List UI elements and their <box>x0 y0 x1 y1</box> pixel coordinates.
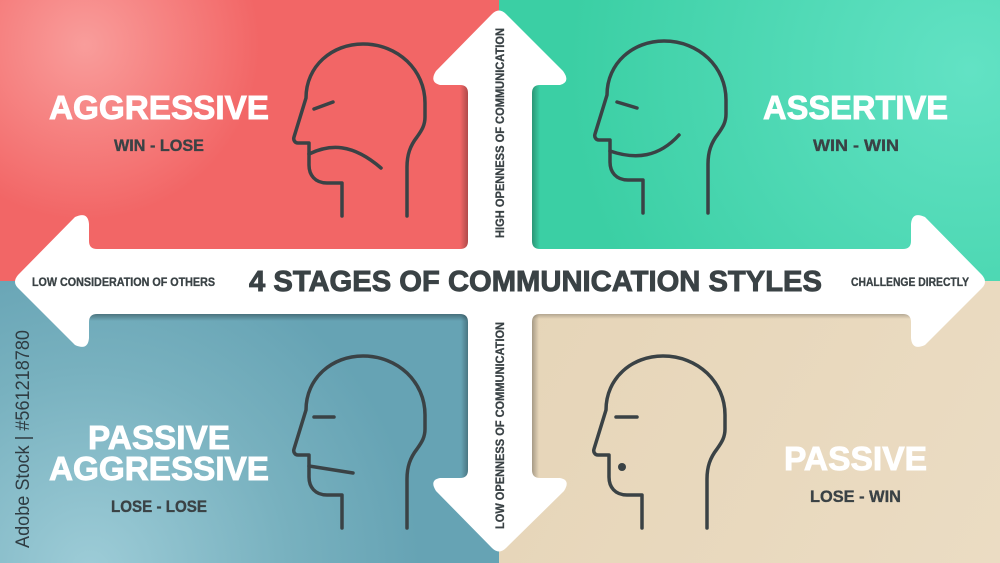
subheading: win lose: WIN - LOSE <box>114 137 204 155</box>
subheading: lose win: LOSE - WIN <box>810 488 901 506</box>
top axis label: HIGH OPENNESS OF COMMUNICATION <box>495 28 507 238</box>
title: 4 STAGES OF COMMUNICATION STYLES <box>249 266 822 298</box>
icon: aggressive head <box>294 44 425 216</box>
heading: passive aggressive: AGGRESSIVE <box>49 450 269 487</box>
heading: assertive: ASSERTIVE <box>763 89 948 126</box>
panel: assertive background <box>499 0 1000 281</box>
heading: passive aggressive <box>49 419 269 487</box>
heading: aggressive: AGGRESSIVE <box>49 89 269 126</box>
heading: passive: PASSIVE <box>784 440 927 477</box>
icon: passive aggressive head <box>294 356 425 528</box>
panel: passive aggressive background <box>0 281 499 563</box>
stock image id label: Adobe Stock | #561218780 <box>13 330 34 548</box>
left axis label: LOW CONSIDERATION OF OTHERS <box>32 277 215 289</box>
icon: assertive head <box>595 41 726 213</box>
panel: aggressive background <box>0 0 499 281</box>
panel: passive background <box>499 281 1000 563</box>
right axis label: CHALLENGE DIRECTLY <box>851 277 969 289</box>
bottom axis label: LOW OPENNESS OF COMMUNICATION <box>495 322 507 529</box>
subheading: lose lose: LOSE - LOSE <box>111 498 207 516</box>
heading: passive aggressive: PASSIVE <box>88 419 230 456</box>
icon: passive head <box>594 356 725 528</box>
subheading: win win: WIN - WIN <box>813 137 899 155</box>
